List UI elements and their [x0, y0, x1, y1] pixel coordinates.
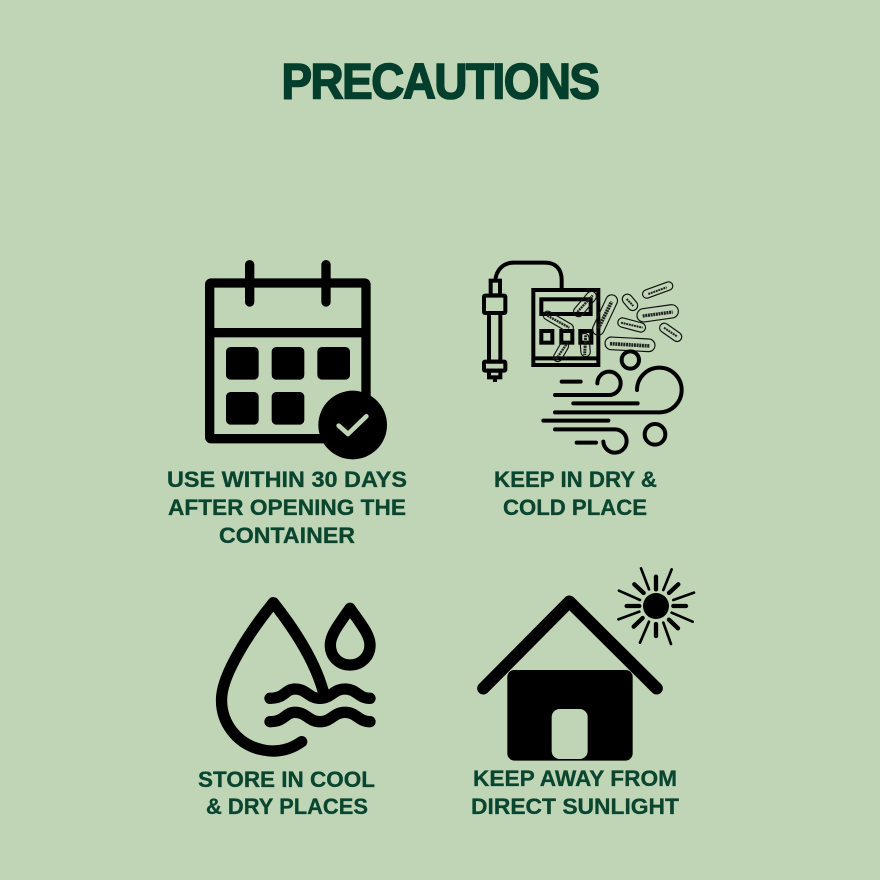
caption: keep in dry and cold place: KEEP IN DRY & — [494, 467, 657, 492]
icon: meter, bacteria and wind — [484, 263, 684, 453]
caption: use within 30 days: CONTAINER — [219, 523, 355, 548]
caption: use within 30 days: AFTER OPENING THE — [168, 495, 406, 520]
icon: house and sun — [483, 568, 694, 761]
caption: store in cool and dry places — [198, 767, 375, 819]
caption: use within 30 days: USE WITHIN 30 DAYS — [167, 467, 407, 492]
title: PRECAUTIONS — [282, 54, 599, 110]
caption: keep away from direct sunlight: DIRECT SUNLIGHT — [471, 794, 679, 819]
caption: keep away from direct sunlight: KEEP AWAY FROM — [473, 766, 677, 791]
caption: use within 30 days — [167, 467, 407, 548]
caption: keep in dry and cold place — [494, 467, 657, 520]
wind — [543, 351, 682, 453]
caption: store in cool and dry places: & DRY PLACES — [206, 794, 368, 819]
icon: water drops and waves — [222, 603, 370, 751]
bacteria interior squiggles — [547, 287, 677, 359]
meter body — [533, 290, 598, 365]
icon: calendar with check badge — [210, 265, 387, 459]
caption: keep in dry and cold place: COLD PLACE — [503, 495, 647, 520]
caption: keep away from direct sunlight — [471, 766, 679, 819]
probe and cable — [484, 263, 562, 382]
caption: store in cool and dry places: STORE IN COOL — [198, 767, 375, 792]
bacteria — [542, 281, 684, 363]
